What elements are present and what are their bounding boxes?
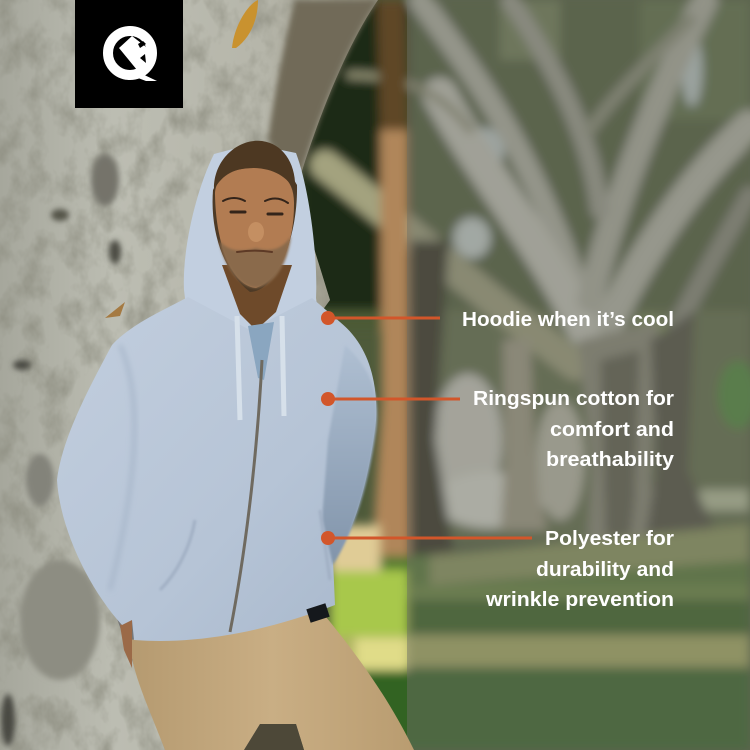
logo box: [75, 0, 183, 108]
background trunks: [372, 0, 718, 572]
hood: [184, 144, 322, 340]
trunk between legs: [244, 724, 304, 750]
beard: [219, 236, 291, 288]
drawstrings: [237, 316, 284, 420]
man in hoodie: [57, 141, 414, 750]
callout: ringspun cotton: Ringspun cotton for: [473, 388, 674, 410]
hand: [120, 620, 132, 668]
callout: ringspun cotton: comfort and: [550, 419, 674, 441]
far sleeve shadow: [322, 345, 377, 565]
sleeve seam: [110, 345, 134, 590]
pants: [130, 612, 414, 750]
brows and eyes: [223, 198, 288, 252]
inner hood shadow: [213, 156, 297, 292]
grey translucent panel: [407, 0, 750, 750]
hem label: [306, 603, 330, 623]
photo background: [300, 0, 750, 750]
callout: polyester: durability and: [536, 559, 674, 581]
zipper: [230, 360, 262, 632]
nose highlight: [248, 222, 264, 242]
callout: polyester: [321, 528, 674, 611]
callout: polyester: wrinkle prevention: [485, 589, 674, 611]
callout: ringspun cotton: breathability: [546, 449, 675, 471]
background branches: [325, 0, 750, 365]
hair: [214, 141, 295, 192]
leaf on trunk: [232, 0, 258, 48]
neck: [222, 265, 292, 330]
face: [215, 168, 294, 288]
callout: polyester: Polyester for: [545, 528, 674, 550]
hoodie body: [57, 297, 376, 641]
callout: ringspun cotton: [321, 388, 675, 471]
tree trunk: [0, 0, 380, 750]
background foliage: [300, 0, 750, 540]
lawn: [330, 525, 750, 750]
t-shirt: [248, 322, 274, 380]
pocket shadow: [160, 510, 330, 590]
callout: hoodie: [321, 309, 674, 331]
logo mark: [108, 31, 157, 81]
callout: hoodie: Hoodie when it’s cool: [462, 309, 674, 331]
